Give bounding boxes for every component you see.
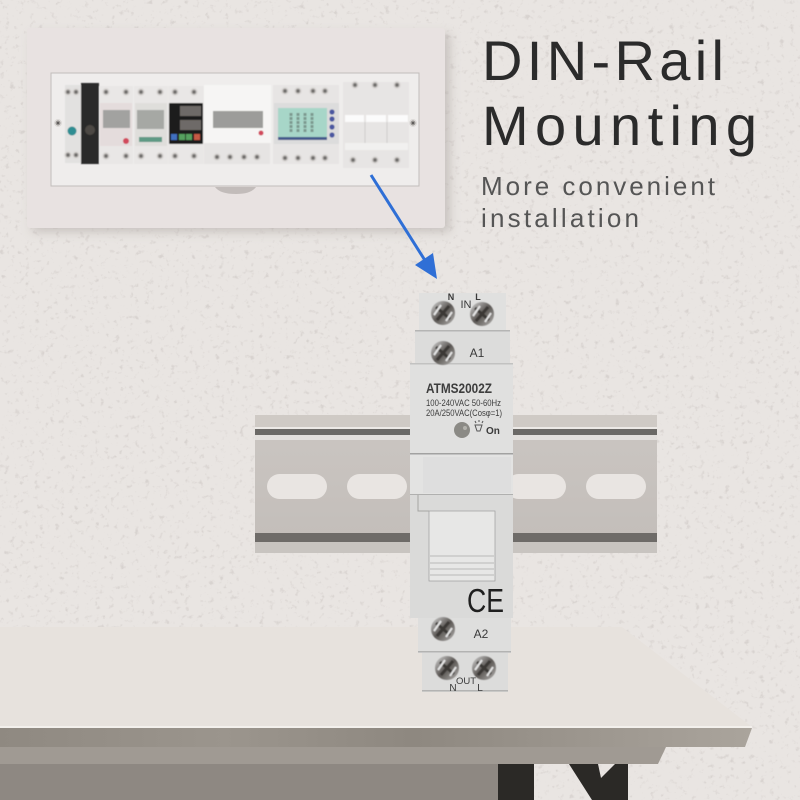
terminal labels: OUT — [456, 676, 476, 687]
meter: wide energy meter — [204, 85, 271, 164]
device specification text: 100-240VAC 50-60Hz — [426, 398, 501, 409]
heading: DIN-Rail — [482, 29, 724, 92]
subheading text: installation — [481, 203, 639, 233]
terminal labels: IN — [460, 299, 472, 311]
indicator light — [454, 420, 500, 438]
subheading text: More convenient — [481, 171, 716, 201]
meter: three small switches — [343, 82, 409, 168]
meter: three phase green LCD — [273, 85, 339, 164]
meter: narrow relay modules — [65, 83, 99, 164]
subheading text — [481, 171, 716, 233]
DIN rail — [255, 415, 657, 553]
device cover wheel — [418, 495, 495, 581]
panel: distribution box with meters — [27, 28, 450, 232]
heading — [482, 29, 757, 157]
terminal labels: N — [448, 292, 454, 302]
device: ATMS2002Z switch — [410, 292, 513, 694]
heading: Mounting — [482, 94, 757, 157]
meter: black temperature controller — [168, 86, 204, 164]
terminal labels: A2 — [474, 627, 489, 641]
meter: first LCD module — [99, 86, 133, 164]
indicator light: On — [486, 426, 500, 437]
device specification text: ATMS2002Z — [426, 381, 492, 396]
device specification text: 20A/250VAC(Cosφ=1) — [426, 408, 502, 419]
CE mark: CE — [467, 582, 504, 619]
terminal labels — [448, 292, 489, 694]
terminal labels: L — [477, 683, 483, 694]
table legs — [498, 764, 628, 800]
terminal labels: N — [449, 683, 457, 694]
terminal screws — [431, 301, 496, 680]
table — [0, 627, 752, 800]
rail slots — [267, 474, 646, 499]
terminal labels: L — [475, 292, 481, 302]
meter: second LCD module — [134, 86, 168, 164]
terminal labels: A1 — [470, 346, 485, 360]
device specification text — [426, 381, 502, 419]
arrow: blue pointer from panel to device — [371, 175, 437, 279]
